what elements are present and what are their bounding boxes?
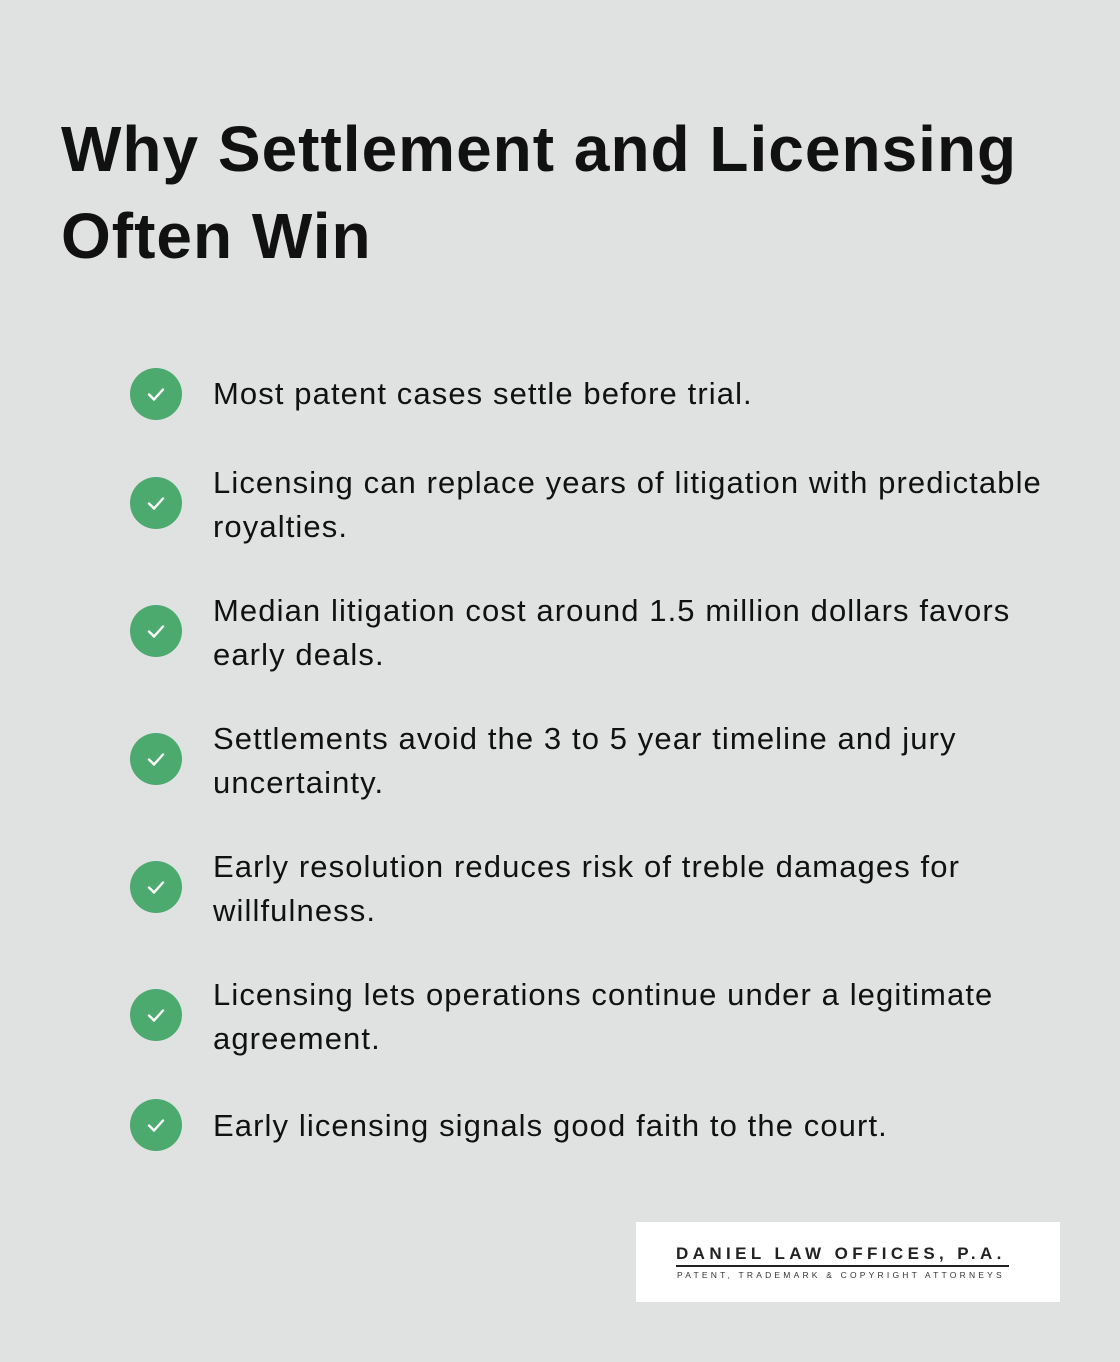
icon: check [130,989,182,1041]
title [61,113,1017,272]
icon: check [130,477,182,529]
logo [636,1222,1060,1302]
icon: check [130,733,182,785]
text: willfulness. [213,893,376,928]
text [213,721,957,800]
text: Settlements avoid the 3 to 5 year timeline and jury [213,721,957,756]
item 1 [130,368,753,420]
text: royalties. [213,509,348,544]
text: Licensing lets operations continue under a legitimate [213,977,993,1012]
item 6 [130,977,993,1056]
text: Most patent cases settle before trial. [213,376,753,411]
text: Licensing can replace years of litigation with predictable [213,465,1042,500]
text [213,465,1042,544]
text: Early licensing signals good faith to the court. [213,1108,888,1143]
icon: check [130,368,182,420]
item 5 [130,849,960,928]
item 7 [130,1099,888,1151]
text [213,977,993,1056]
text: early deals. [213,637,385,672]
title: Often Win [61,200,372,272]
item 4 [130,721,957,800]
icon: check [130,861,182,913]
logo: PATENT, TRADEMARK & COPYRIGHT ATTORNEYS [677,1270,1005,1280]
text: Early resolution reduces risk of treble damages for [213,849,960,884]
text: uncertainty. [213,765,384,800]
title: Why Settlement and Licensing [61,113,1017,185]
text [213,593,1010,672]
text: Median litigation cost around 1.5 million dollars favors [213,593,1010,628]
item 2 [130,465,1042,544]
icon: check [130,1099,182,1151]
logo: DANIEL LAW OFFICES, P.A. [676,1244,1006,1263]
text [213,849,960,928]
text: agreement. [213,1021,381,1056]
icon: check [130,605,182,657]
item 3 [130,593,1010,672]
